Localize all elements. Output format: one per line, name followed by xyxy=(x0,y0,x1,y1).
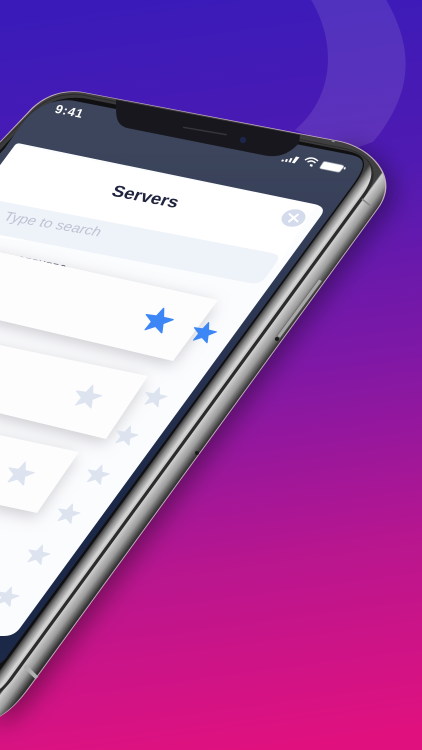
bottom antenna line xyxy=(25,666,37,678)
panel contents xyxy=(0,145,316,607)
camera xyxy=(240,137,246,143)
side volume button xyxy=(277,279,322,338)
star: row 3 outer xyxy=(116,426,138,446)
header white area xyxy=(0,145,15,166)
speaker xyxy=(183,126,227,136)
status icons xyxy=(281,156,346,172)
app panel xyxy=(0,143,323,636)
phone inner metal band xyxy=(0,95,371,694)
star: row 7 xyxy=(0,586,20,607)
close circle xyxy=(282,209,306,227)
top antenna line xyxy=(332,140,335,142)
heading: Servers xyxy=(109,182,183,212)
phone dark groove xyxy=(0,94,374,700)
phone black bezel xyxy=(0,98,364,684)
screen background xyxy=(0,100,363,668)
server card 3 xyxy=(0,433,79,513)
star: card 2 xyxy=(75,384,102,408)
decorative translucent arc xyxy=(295,0,406,150)
star: row 2 outer xyxy=(144,387,168,408)
notch xyxy=(116,100,300,156)
time: 9:41 xyxy=(53,102,86,121)
phone xyxy=(0,91,386,722)
wifi xyxy=(305,158,318,166)
antenna marks and side buttons xyxy=(25,140,372,678)
search bar xyxy=(0,200,278,283)
side dot upper xyxy=(275,337,279,341)
close button xyxy=(282,209,306,227)
server card 2 xyxy=(0,343,148,439)
card shadows xyxy=(0,254,216,517)
star: row 4 outer xyxy=(87,464,110,485)
side dot lower xyxy=(195,451,199,455)
phone body light edge xyxy=(0,91,386,722)
close cross xyxy=(289,214,298,222)
corner antenna line xyxy=(362,199,372,207)
phone drop shadow xyxy=(0,146,393,727)
search placeholder: Type to search xyxy=(2,209,103,240)
star: active outer xyxy=(192,322,217,344)
star: active card 1 xyxy=(144,308,174,334)
signal bars xyxy=(281,156,300,163)
battery xyxy=(320,161,346,172)
star: row 5 xyxy=(58,504,80,524)
phone outer metal band xyxy=(0,92,385,722)
star: row 6 xyxy=(28,544,50,565)
server card 1 xyxy=(0,250,218,361)
star: card 3 xyxy=(8,462,34,486)
